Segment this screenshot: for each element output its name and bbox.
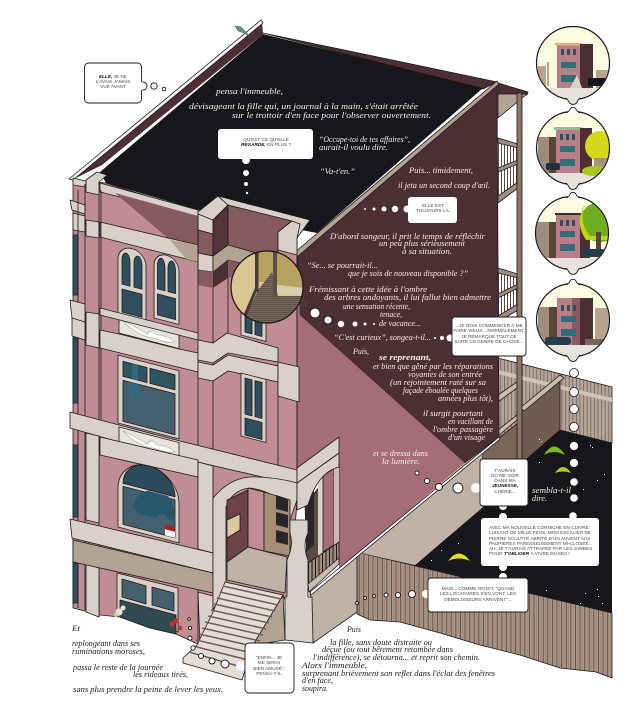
speech bubble: mais comme on dit: LES LOCATAIRES S'EN VONT, LES [440, 591, 516, 596]
white narration on side wall: l'ombre passagère [433, 424, 493, 434]
speech bubble: je dois commencer à me faire vieux [310, 308, 526, 356]
speech bubble: elle, je ne l'avais jamais vue avant: L'AVAIS JAMAIS [96, 79, 130, 84]
white narration on side wall: et bien que gêné par les réparations [373, 361, 494, 371]
flowers [114, 606, 182, 630]
narration in yard: sembla-t-il [532, 485, 572, 495]
white narration on side wall: “Se... se pourrait-il... [307, 260, 378, 270]
medallion 2 [536, 111, 610, 185]
narration bottom centre: soupira. [302, 683, 328, 693]
speech bubble: avec ma nouvelle corniche: LUISANT DE MILLE FEUX, MON ESCALIER DE [489, 530, 591, 535]
speech bubble: avec ma nouvelle corniche: AVEC MA NOUVELLE CORNICHE EN CUIVRE [489, 525, 589, 530]
speech bubble: qu'est-ce qu'elle regarde: QU'EST-CE QU'ELLE [243, 137, 289, 142]
porch arch [213, 437, 339, 643]
roof cornice [70, 172, 198, 232]
belt 3 lip [70, 412, 297, 485]
speech bubble: je dois commencer à me faire vieux: FAIRE VIEUX... NORMALEMENT, [453, 328, 525, 333]
white narration on side wall: la lumière. [382, 456, 420, 466]
white narration on side wall [307, 165, 494, 466]
stairs [183, 582, 285, 680]
shadow on upper wall [115, 193, 198, 246]
roof [69, 20, 497, 233]
narration bottom left: Et [71, 623, 81, 633]
speech bubble: elle, je ne l'avais jamais vue avant: VUE AVANT [100, 84, 126, 89]
white narration on side wall: d'un visage [448, 432, 485, 442]
speech bubble: avec ma nouvelle corniche: POUR T'OBLIGER À VIVRE EN MOI ! [489, 550, 570, 556]
white narration on roof: “Occupe-toi de tes affaires”, [319, 134, 410, 144]
white narration on roof: pensa l'immeuble, [215, 86, 283, 96]
speech bubble: mais comme on dit [356, 578, 528, 612]
speech bubble: t'aurais dû me voir dans ma jeunesse: T'AURAIS [494, 468, 516, 473]
night yard [357, 430, 612, 613]
speech bubble: avec ma nouvelle corniche: PIERRE SCULPTÉ ABRITÉ D'UN AUVENT AUX [489, 535, 591, 541]
narration bottom centre: l'indifférence), se détourna... et reprit son chemin. [313, 652, 480, 662]
medallion 3 [534, 196, 610, 270]
white narration on side wall: “C'est curieux”, songea-t-il... [334, 332, 431, 342]
narration bottom centre [301, 624, 496, 693]
white narration on side wall: une sensation récente, [343, 301, 410, 311]
basement window [117, 573, 178, 634]
narration bottom centre: d'en face, [302, 675, 333, 685]
porch column [285, 520, 313, 643]
white narration on side wall: il jeta un second coup d'œil. [398, 180, 490, 190]
speech bubble: elle est toujours là: TOUJOURS LÀ. [416, 207, 450, 213]
white narration on side wall: se reprenant, [378, 352, 431, 362]
back yard fences [482, 318, 612, 507]
narration in yard [532, 485, 572, 503]
narration bottom left: passa le reste de la journée [72, 662, 163, 672]
arched window 2 [154, 252, 179, 324]
speech bubble: mais comme on dit: MAIS... COMME ON DIT, "QUAND [442, 586, 515, 591]
arched window 1 [118, 245, 146, 322]
window with a figure [118, 355, 179, 439]
narration bottom left [71, 623, 223, 694]
speech bubble: elle est toujours là: ELLE EST [422, 203, 444, 208]
white narration on side wall: à sa situation. [402, 246, 452, 256]
white narration on side wall: voyantes de son entrée [408, 369, 482, 379]
white narration on roof: sur le trottoir d'en face pour l'observer ouvertement. [232, 110, 431, 120]
narration bottom left: replongeant dans ses [72, 638, 141, 648]
speech bubble: qu'est-ce qu'elle regarde: REGARDE, EN PLUS ? [241, 142, 291, 147]
white narration on side wall: façade éboulée quelques [403, 385, 479, 395]
belt 2 [70, 300, 299, 402]
white narration on side wall: et se dressa dans [373, 448, 429, 458]
front facade [70, 172, 339, 680]
white narration on roof: “Va-t'en.” [320, 166, 355, 176]
white narration on side wall: tenace, [380, 309, 402, 319]
speech bubble: elle, je ne l'avais jamais vue avant: ELLE, JE NE [99, 74, 127, 79]
speech bubble: je dois commencer à me faire vieux: JE REMARQUE TOUT DE [461, 334, 517, 339]
lower piers [86, 433, 213, 645]
speech bubble: elle, je ne l'avais jamais vue avant [84, 63, 166, 103]
arched window with reflected car [118, 458, 179, 543]
side windows [73, 235, 78, 603]
speech bubble: t'aurais dû me voir dans ma jeunesse: JEUNESSE, [492, 483, 518, 488]
speech bubble: enfin je me serai bien amusé [188, 618, 294, 693]
white narration on side wall: de vacance... [379, 318, 421, 328]
white narration on side wall: un peu plus sérieusement [379, 238, 466, 248]
speech bubble: avec ma nouvelle corniche: AH, JE T'AURAIS ATTRAPÉE PAR LES JAMBES [489, 545, 592, 551]
speech bubble: t'aurais dû me voir dans ma jeunesse: DANS MA [494, 478, 517, 483]
narration bottom left: les rideaux tirés, [133, 669, 188, 679]
side wall [294, 81, 500, 643]
pier and upper recess [198, 196, 310, 288]
speech bubble: qu'est-ce qu'elle regarde [218, 129, 313, 194]
white narration on side wall: années plus tôt), [438, 393, 493, 403]
speech bubble: avec ma nouvelle corniche [481, 518, 599, 581]
bay window lower [241, 373, 266, 442]
narration bottom centre: surprenant brièvement son reflet dans l'éclat des fenêtres [302, 668, 496, 678]
white narration on roof [189, 86, 431, 176]
narration bottom centre: Puis [346, 624, 362, 634]
speech bubble: mais comme on dit: DÉMOLISSEURS ARRIVENT"... [444, 596, 512, 602]
speech bubble: enfin je me serai bien amusé: PENSA-T-IL [256, 671, 282, 676]
narration bottom left: sans plus prendre la peine de lever les yeux. [73, 684, 223, 694]
white narration on side wall: (un rejointement raté sur sa [390, 377, 486, 387]
white narration on side wall: Puis, [352, 346, 369, 356]
speech bubble: t'aurais dû me voir dans ma jeunesse: DÛ ME VOIR [491, 472, 520, 478]
medallion 1 [536, 26, 610, 108]
white narration on side wall: D'abord songeur, il prit le temps de réfléchir [329, 231, 486, 241]
white narration on side wall: des arbres ondoyants, il lui fallut bien admettre [324, 292, 491, 302]
narration bottom centre: la fille, sans doute distraite ou [330, 637, 432, 647]
speech bubble: enfin je me serai bien amusé: "ENFIN... JE [256, 655, 282, 660]
vertical divisions [78, 184, 297, 645]
white narration on side wall: Puis... timidement, [408, 165, 473, 175]
speech bubble: je dois commencer à me faire vieux: SUITE CE GENRE DE CHOSE... [454, 339, 524, 344]
stars in the yard [431, 439, 605, 604]
speech bubble: enfin je me serai bien amusé: ME SERAI [258, 660, 280, 665]
base belt [70, 519, 213, 593]
white narration on roof: dévisageant la fille qui, un journal à la main, s'était arrêtée [189, 101, 418, 111]
speech bubble: t'aurais dû me voir dans ma jeunesse [415, 459, 528, 521]
narration bottom centre: Alors l'immeuble, [301, 660, 367, 670]
narration bottom left: ruminations moroses, [72, 646, 145, 656]
speech bubble: je dois commencer à me faire vieux: ...JE DOIS COMMENCER À ME [455, 322, 523, 328]
white narration on roof: aurait-il voulu dire. [319, 142, 388, 152]
narration in yard: dire. [532, 493, 547, 503]
medallion 4 [536, 284, 611, 365]
white narration on side wall: Frémissant à cette idée à l'ombre [308, 284, 427, 294]
front fence [357, 552, 612, 678]
white narration on side wall: que je sois de nouveau disponible ?” [348, 268, 468, 278]
speech bubble: elle est toujours là [364, 197, 457, 223]
thought chain from medallions [569, 368, 578, 520]
speech bubble: t'aurais dû me voir dans ma jeunesse: CHÉRIE... [494, 488, 516, 494]
balconies at the rear of the building [498, 83, 528, 322]
ornamental panel 2 [119, 427, 179, 459]
white narration on side wall: il surgit pourtant [423, 408, 484, 418]
speech bubble: enfin je me serai bien amusé: BIEN AMUSÉ", [253, 665, 285, 671]
medallion connecting bumps [566, 98, 580, 361]
belt 4 [100, 437, 198, 477]
white narration on side wall: en vacillant de [448, 416, 493, 426]
lens view into the interior [231, 250, 308, 325]
icon: bird on the parapet [235, 26, 250, 37]
ornamental panel 1 [119, 317, 179, 349]
upper belt [86, 220, 198, 262]
tufts of grass [448, 446, 571, 561]
speech bubble: avec ma nouvelle corniche: PAUPIÈRES PARESSEUSEMENT MI-CLOSES... [489, 540, 592, 546]
narration bottom centre: déçue (ou tout bêtement retombée dans [322, 644, 454, 654]
right porch opening [297, 437, 339, 592]
bay window upper [241, 313, 266, 342]
